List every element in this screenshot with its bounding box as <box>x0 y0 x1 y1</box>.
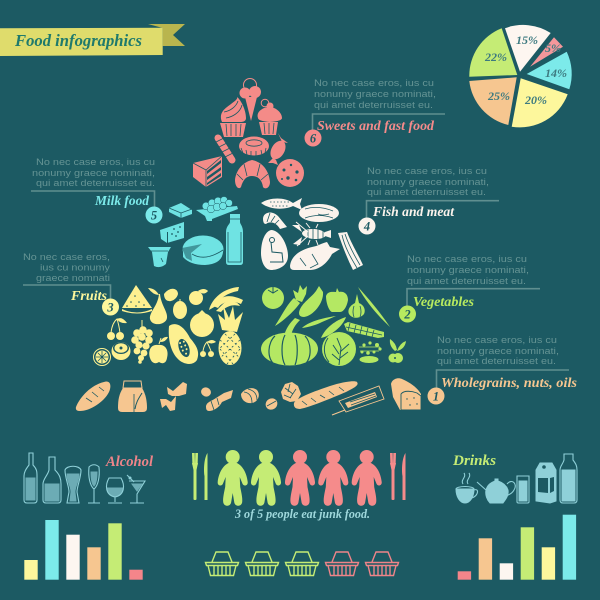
text block: wholegrains: nonumy graece nominati, <box>437 346 559 356</box>
text block: milk: No nec case eros, ius cu <box>36 157 155 167</box>
heading: vegetables: Vegetables <box>413 295 475 310</box>
heading: fruits: Fruits <box>70 289 108 304</box>
text block: wholegrains: No nec case eros, ius cu <box>437 335 557 345</box>
text block: fruits <box>23 252 111 300</box>
pyramid tier: fish and meat <box>261 198 363 270</box>
text block: wholegrains <box>436 335 569 388</box>
badge 2 <box>399 306 416 322</box>
drinks bar chart <box>458 515 576 580</box>
alcohol icons <box>24 453 145 503</box>
badge 5 <box>146 206 162 224</box>
text block: vegetables: nonumy graece nominati, <box>407 265 529 275</box>
text block: sweets: nonumy graece nominati, <box>314 89 436 99</box>
pie chart: 14% <box>545 66 567 80</box>
heading: wholegrains: Wholegrains, nuts, oils <box>441 376 578 391</box>
badge 6: 6 <box>310 132 317 146</box>
text block: fish: nonumy graece nominati, <box>367 177 489 187</box>
text block: milk: nonumy graece nominati, <box>32 168 155 178</box>
pie chart: 20% <box>524 93 547 107</box>
text block: milk: qui amet deterruisset eu. <box>36 178 155 188</box>
pyramid tier: milk food <box>148 196 243 267</box>
pie chart: 22% <box>484 50 507 64</box>
pie chart <box>469 25 572 127</box>
text block: fruits: graece nomnati <box>36 273 110 283</box>
text block: sweets: No nec case eros, ius cu <box>314 78 434 88</box>
pyramid tier: wholegrains <box>76 378 421 415</box>
text block: fish <box>366 166 499 218</box>
badge 3: 3 <box>106 300 114 314</box>
text block: vegetables: qui amet deterruisset eu. <box>407 276 526 286</box>
pyramid tier: fruits <box>94 285 243 366</box>
heading: fish and meat: Fish and meat <box>372 205 455 220</box>
text block: fish: No nec case eros, ius cu <box>367 166 487 176</box>
people with cutlery <box>192 450 406 506</box>
text block: fruits: No nec case eros, <box>23 252 110 262</box>
caption: 3 of 5 people eat junk food. <box>234 507 370 521</box>
badge 4 <box>358 218 376 234</box>
badge 1 <box>428 388 444 404</box>
text block: milk <box>31 157 155 208</box>
badge 3 <box>102 298 119 316</box>
text block: fruits: ius cu nonumy <box>40 262 111 272</box>
badge 2: 2 <box>403 308 411 322</box>
title banner <box>0 24 185 56</box>
baskets <box>206 552 398 576</box>
text block: vegetables <box>407 254 540 306</box>
text block: vegetables: No nec case eros, ius cu <box>407 254 527 264</box>
heading: drinks: Drinks <box>452 453 496 469</box>
heading: alcohol: Alcohol <box>105 454 154 470</box>
heading: sweets and fast food: Sweets and fast food <box>317 119 435 134</box>
pie chart: 15% <box>516 33 538 47</box>
text block: wholegrains: qui amet deterruisset eu. <box>437 356 556 366</box>
text block: fish: qui amet deterruisset eu. <box>367 187 486 197</box>
badge 6 <box>304 130 322 146</box>
pie chart: 25% <box>487 89 510 103</box>
title banner: Food infographics <box>14 31 142 50</box>
badge 4: 4 <box>363 220 370 234</box>
drinks icons <box>456 454 577 503</box>
pyramid tier: sweets <box>193 78 304 188</box>
text block: sweets: qui amet deterruisset eu. <box>314 100 433 110</box>
pie chart: 5% <box>545 41 561 55</box>
heading: milk food: Milk food <box>94 194 150 209</box>
pyramid tier: vegetables <box>261 285 406 366</box>
alcohol bar chart <box>24 520 143 580</box>
badge 1: 1 <box>433 390 439 404</box>
badge 5: 5 <box>151 208 157 222</box>
text block: sweets <box>312 78 445 132</box>
